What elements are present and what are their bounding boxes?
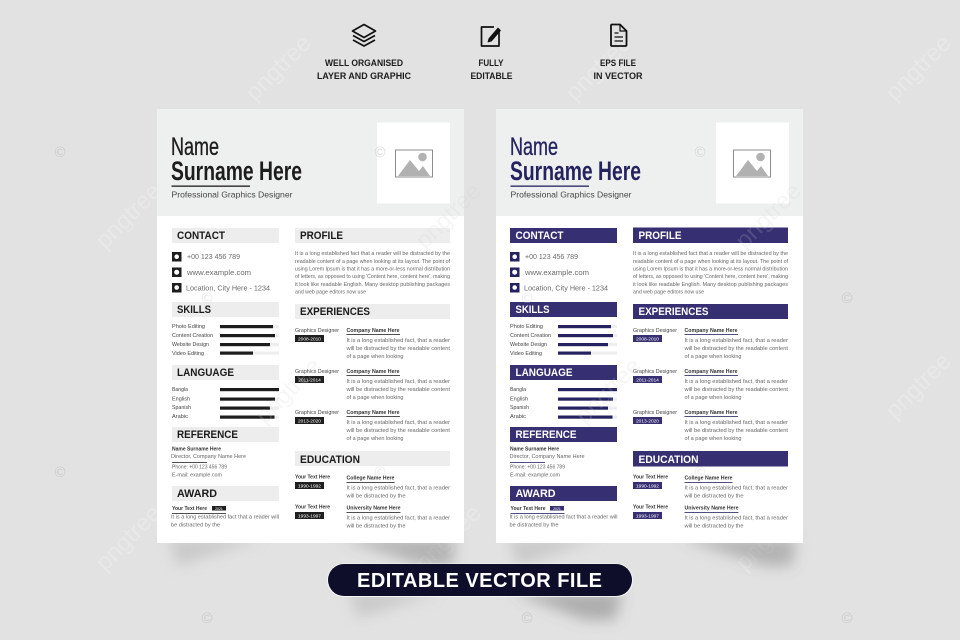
- experience entries: Graphics Designer: [633, 369, 677, 375]
- skills chart: Photo Editing: [172, 324, 205, 330]
- page: [157, 109, 464, 543]
- education entries: Your Text Here: [295, 475, 330, 481]
- education entries: It is a long established fact, that a reader: [684, 516, 788, 522]
- language chart: English: [510, 396, 528, 402]
- experience entries: Company Name Here: [684, 328, 738, 334]
- experience entries: 2013-2020: [636, 418, 659, 424]
- watermark pattern: pngtree: [410, 500, 487, 576]
- profile text: using Lorem Ipsum is that it has a more-or-less normal distribution: [633, 266, 788, 272]
- skills chart: Content Creation: [510, 333, 551, 339]
- subheading: layer and graphic: LAYER AND GRAPHIC: [317, 71, 412, 81]
- profile text: It is a long established fact that a reader will be distracted by the: [633, 251, 788, 257]
- banner: editable vector file: EDITABLE VECTOR FILE: [357, 570, 602, 592]
- education entries: 1993-1997: [298, 514, 321, 520]
- watermark over pages: pngtree: [250, 353, 327, 429]
- contact list: www.example.com: [186, 268, 251, 277]
- heading: award: AWARD: [177, 488, 217, 500]
- education entries: 1990-1992: [298, 484, 321, 490]
- reference details: Name Surname Here: [172, 446, 221, 452]
- education entries: University Name Here: [684, 506, 739, 512]
- heading: education: [633, 451, 788, 466]
- heading: language: LANGUAGE: [177, 367, 234, 379]
- experience entries: will be distracted by the readable content: [346, 346, 451, 352]
- icon: document: [611, 24, 626, 46]
- language chart: English: [172, 396, 190, 402]
- language chart: Spanish: [510, 405, 529, 411]
- name rule: [172, 186, 250, 187]
- education entries: It is a long established fact, that a reader: [346, 486, 450, 492]
- education entries: will be distracted by the: [684, 494, 744, 500]
- photo placeholder: [377, 122, 450, 204]
- education entries: [633, 475, 788, 530]
- watermark over pages: pngtree: [410, 178, 487, 254]
- award details: It is a long established fact that a reader will: [171, 514, 279, 520]
- watermark over pages: [201, 144, 807, 481]
- experience entries: 2013-2020: [298, 418, 321, 424]
- watermark pattern: pngtree: [880, 348, 957, 424]
- experience entries: of a page when looking: [684, 395, 742, 401]
- experience entries: Company Name Here: [346, 369, 400, 375]
- watermark pattern: pngtree: [90, 500, 167, 576]
- award details: Your Text Here: [172, 506, 207, 512]
- heading: reference: REFERENCE: [516, 429, 576, 441]
- watermark pattern: ©: [201, 610, 213, 627]
- experience entries: Graphics Designer: [295, 328, 339, 334]
- job title: Professional Graphics Designer: [172, 190, 293, 200]
- page shadows: [168, 538, 796, 620]
- skills chart: Photo Editing: [510, 324, 543, 330]
- heading: education: [295, 451, 450, 466]
- skills chart: Video Editing: [510, 351, 542, 357]
- watermark pattern: pngtree: [880, 30, 957, 106]
- education entries: College Name Here: [346, 476, 395, 482]
- icon: layers: [352, 24, 376, 46]
- experience entries: Graphics Designer: [633, 410, 677, 416]
- feature: eps file: [594, 24, 643, 81]
- experience entries: It is a long established fact, that a reader: [346, 379, 450, 385]
- language chart: Arabic: [510, 414, 526, 420]
- subheading: editable: EDITABLE: [470, 71, 513, 81]
- heading: experiences: EXPERIENCES: [638, 306, 708, 318]
- reference details: Director, Company Name Here: [171, 454, 246, 460]
- watermark pattern: pngtree: [90, 178, 167, 254]
- heading: education: EDUCATION: [300, 454, 360, 466]
- language chart: Arabic: [172, 414, 188, 420]
- watermark over pages: ©: [694, 464, 706, 481]
- award details: 2021: [553, 507, 561, 511]
- profile text: [295, 251, 451, 296]
- heading: education: EDUCATION: [638, 454, 699, 466]
- photo placeholder: [716, 122, 789, 204]
- experience entries: will be distracted by the readable content: [684, 346, 789, 352]
- watermark over pages: ©: [694, 144, 706, 161]
- heading: experiences: [633, 304, 788, 319]
- experience entries: Graphics Designer: [295, 410, 339, 416]
- feature: well organised layers: [317, 24, 412, 81]
- watermark over pages: pngtree: [570, 353, 647, 429]
- experience entries: Company Name Here: [346, 328, 400, 334]
- profile text: and web page editors now use: [633, 290, 704, 296]
- profile text: it look like readable English. Many desktop publishing packages: [633, 282, 788, 288]
- skills chart: Website Design: [510, 342, 547, 348]
- profile text: using Lorem Ipsum is that it has a more-or-less normal distribution: [295, 266, 450, 272]
- watermark pattern: ©: [841, 610, 853, 627]
- language chart: [172, 387, 279, 420]
- experience entries: will be distracted by the readable content: [684, 428, 789, 434]
- watermark over pages: pngtree: [730, 178, 807, 254]
- watermark pattern: ©: [521, 610, 533, 627]
- experience entries: of a page when looking: [346, 395, 404, 401]
- watermark pattern: ©: [54, 464, 66, 481]
- language chart: Bangla: [510, 387, 526, 393]
- heading: skills: SKILLS: [516, 304, 550, 316]
- contact list: +00 123 456 789: [525, 252, 578, 261]
- watermark pattern: ©: [841, 290, 853, 307]
- watermark over pages: ©: [521, 290, 533, 307]
- panel: navy resume: [496, 109, 803, 543]
- surname: Surname Here: [510, 156, 641, 186]
- contact list: [172, 252, 270, 292]
- language chart: [510, 387, 617, 420]
- reference details: Director, Company Name Here: [510, 454, 585, 460]
- watermark over pages: ©: [374, 464, 386, 481]
- experience entries: It is a long established fact, that a reader: [684, 338, 788, 344]
- heading: reference: [510, 427, 617, 442]
- heading: contact: [510, 228, 617, 243]
- watermark over pages: ©: [201, 290, 213, 307]
- skills chart: Video Editing: [172, 351, 204, 357]
- heading: skills: [172, 302, 279, 317]
- education entries: will be distracted by the: [684, 524, 744, 530]
- contact list: [510, 252, 608, 292]
- education entries: 1993-1997: [636, 514, 659, 520]
- experience entries: 2011-2014: [298, 378, 321, 384]
- experience entries: of a page when looking: [684, 354, 742, 360]
- profile text: readable content of a page when looking at its layout. The point of: [633, 259, 789, 265]
- name: Name: [171, 133, 219, 161]
- experience entries: will be distracted by the readable content: [346, 387, 451, 393]
- profile text: of letters, as opposed to using 'Content here, content here', making: [295, 274, 450, 280]
- heading: language: [172, 365, 279, 380]
- heading: profile: [633, 228, 788, 243]
- heading: profile: PROFILE: [300, 230, 343, 242]
- reference details: [171, 446, 246, 478]
- heading: language: [510, 365, 617, 380]
- feature: fully editable: [470, 27, 513, 81]
- heading: contact: [172, 228, 279, 243]
- icon: edit: [482, 27, 500, 46]
- heading: fully: FULLY: [478, 58, 504, 68]
- profile text: and web page editors now use: [295, 290, 366, 296]
- education entries: will be distracted by the: [346, 494, 406, 500]
- reference details: Phone: +00 123 456 789: [172, 465, 227, 471]
- education entries: Your Text Here: [633, 505, 668, 511]
- experience entries: of a page when looking: [346, 354, 404, 360]
- banner: editable vector file: [327, 564, 633, 597]
- header band: [157, 109, 464, 216]
- profile text: it look like readable English. Many desktop publishing packages: [295, 282, 450, 288]
- contact list: Location, City Here - 1234: [524, 284, 608, 292]
- experience entries: of a page when looking: [346, 436, 404, 442]
- heading: reference: [172, 427, 279, 442]
- experience entries: Company Name Here: [684, 369, 738, 375]
- panel: monochrome resume: [157, 109, 464, 543]
- reference details: Name Surname Here: [510, 446, 559, 452]
- heading: well organised: WELL ORGANISED: [325, 58, 403, 68]
- heading: profile: PROFILE: [638, 230, 682, 242]
- experience entries: Company Name Here: [684, 410, 738, 416]
- heading: contact: CONTACT: [516, 230, 564, 242]
- experience entries: It is a long established fact, that a reader: [346, 420, 450, 426]
- award details: [510, 506, 618, 528]
- heading: contact: CONTACT: [177, 230, 225, 242]
- skills chart: [510, 324, 617, 357]
- skills chart: Content Creation: [172, 333, 213, 339]
- experience entries: of a page when looking: [684, 436, 742, 442]
- profile text: [633, 251, 789, 296]
- reference details: Phone: +00 123 456 789: [510, 465, 565, 471]
- header band: [496, 109, 803, 216]
- profile text: It is a long established fact that a reader will be distracted by the: [295, 251, 450, 257]
- education entries: 1990-1992: [636, 484, 659, 490]
- profile text: readable content of a page when looking at its layout. The point of: [295, 259, 451, 265]
- heading: language: LANGUAGE: [516, 367, 572, 379]
- page: [496, 109, 803, 543]
- reference details: E-mail: example.com: [172, 472, 222, 478]
- heading: award: [172, 486, 279, 501]
- contact list: www.example.com: [524, 268, 589, 277]
- award details: 2021: [215, 507, 223, 511]
- heading: skills: SKILLS: [177, 304, 211, 316]
- experience entries: It is a long established fact, that a reader: [684, 420, 788, 426]
- language chart: Bangla: [172, 387, 188, 393]
- experience entries: Graphics Designer: [295, 369, 339, 375]
- contact list: Location, City Here - 1234: [186, 284, 270, 292]
- experience entries: 2011-2014: [636, 378, 659, 384]
- award details: be distracted by the: [171, 522, 220, 528]
- watermark pattern: pngtree: [240, 30, 317, 106]
- language chart: Spanish: [172, 405, 191, 411]
- education entries: Your Text Here: [633, 475, 668, 481]
- education entries: will be distracted by the: [346, 524, 406, 530]
- award details: It is a long established fact that a reader will: [510, 514, 618, 520]
- experience entries: 2008-2010: [298, 336, 321, 342]
- education entries: It is a long established fact, that a reader: [346, 516, 450, 522]
- contact list: +00 123 456 789: [187, 252, 240, 261]
- experience entries: Company Name Here: [346, 410, 400, 416]
- education entries: University Name Here: [346, 506, 401, 512]
- education entries: College Name Here: [684, 476, 733, 482]
- heading: award: [510, 486, 617, 501]
- name: Name: [510, 133, 558, 161]
- heading: skills: [510, 302, 617, 317]
- experience entries: It is a long established fact, that a reader: [346, 338, 450, 344]
- heading: experiences: EXPERIENCES: [300, 306, 370, 318]
- experience entries: [295, 328, 451, 442]
- watermark pattern: pngtree: [560, 30, 637, 106]
- surname: Surname Here: [171, 156, 302, 186]
- education entries: It is a long established fact, that a reader: [684, 486, 788, 492]
- skills chart: [172, 324, 279, 357]
- award details: [171, 506, 279, 528]
- experience entries: It is a long established fact, that a reader: [684, 379, 788, 385]
- experience entries: 2008-2010: [636, 336, 659, 342]
- subheading: in vector: IN VECTOR: [594, 71, 643, 81]
- heading: profile: [295, 228, 450, 243]
- award details: Your Text Here: [510, 506, 546, 512]
- job title: Professional Graphics Designer: [510, 190, 632, 200]
- heading: eps file: EPS FILE: [600, 58, 636, 68]
- heading: award: AWARD: [516, 488, 556, 500]
- watermark pattern: pngtree: [730, 500, 807, 576]
- profile text: of letters, as opposed to using 'Content here, content here', making: [633, 274, 788, 280]
- reference details: E-mail: example.com: [510, 472, 560, 478]
- experience entries: [633, 328, 789, 442]
- experience entries: Graphics Designer: [633, 328, 677, 334]
- skills chart: Website Design: [172, 342, 209, 348]
- name rule: [510, 186, 589, 187]
- experience entries: will be distracted by the readable content: [684, 387, 789, 393]
- reference details: [510, 446, 585, 478]
- heading: reference: REFERENCE: [177, 429, 238, 441]
- watermark pattern: ©: [54, 144, 66, 161]
- watermark over pages: ©: [374, 144, 386, 161]
- education entries: Your Text Here: [295, 505, 330, 511]
- education entries: [295, 475, 450, 530]
- experience entries: will be distracted by the readable content: [346, 428, 451, 434]
- award details: be distracted by the: [510, 522, 559, 528]
- heading: experiences: [295, 304, 450, 319]
